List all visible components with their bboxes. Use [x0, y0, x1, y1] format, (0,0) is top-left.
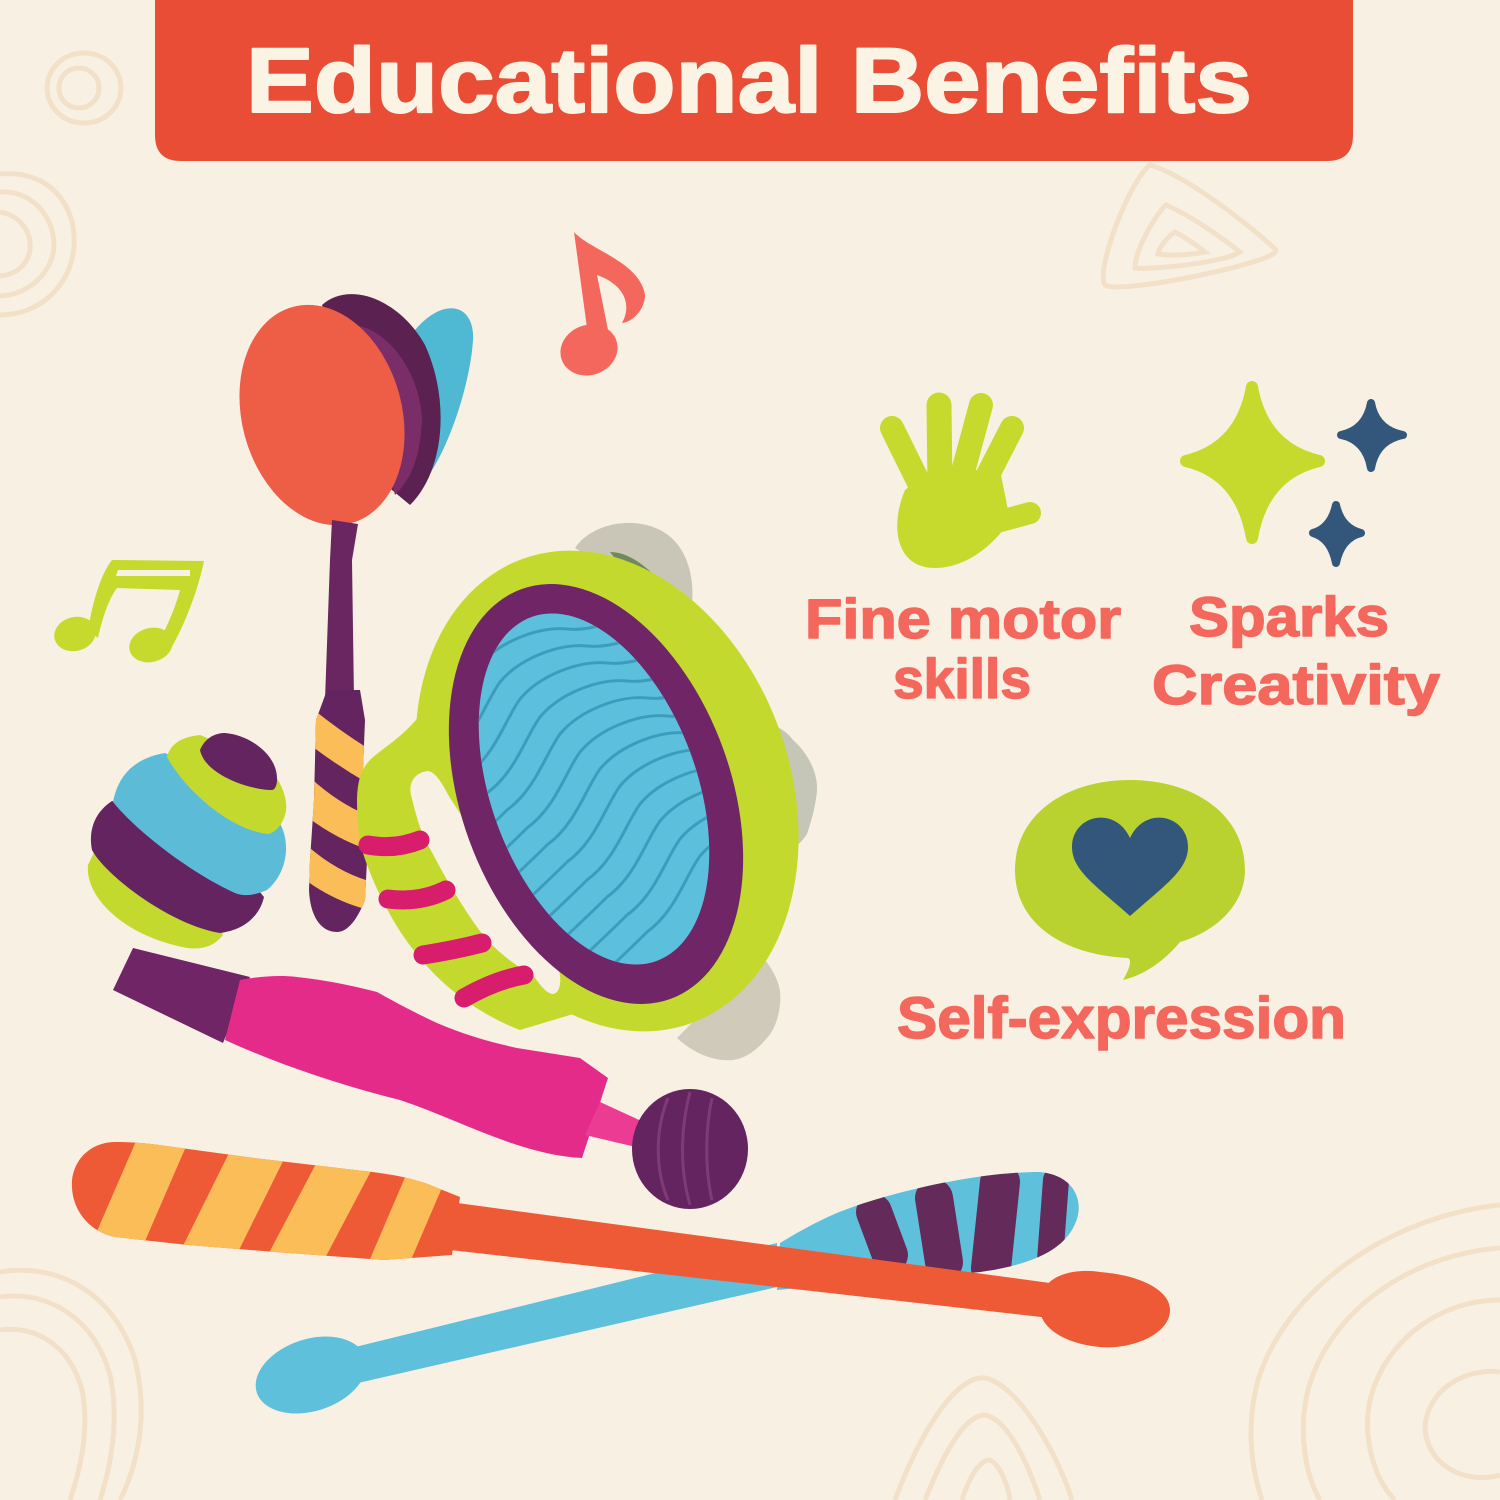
label: fine motor skills: Fine motor [805, 587, 1121, 650]
title: Educational Benefits [246, 30, 1252, 132]
toy: egg shaker [88, 733, 286, 948]
toy: pink kazoo [113, 948, 748, 1209]
toy: tambourine [357, 522, 817, 1060]
title banner [155, 0, 1353, 161]
icon: sparkles [1186, 387, 1403, 563]
icon: hand [892, 405, 1030, 568]
label: sparks creativity: Sparks [1189, 585, 1389, 648]
toy: castanet maraca [216, 286, 473, 932]
toy: blue drumstick [246, 1172, 1079, 1427]
label: self-expression: Self-expression [897, 986, 1346, 1051]
icon: speech bubble with heart [1015, 780, 1245, 980]
toy: orange drumstick [72, 1130, 1170, 1347]
icon: green music notes [50, 560, 204, 667]
label: fine motor skills: skills [893, 647, 1031, 710]
label: sparks creativity: Creativity [1152, 653, 1440, 716]
icon: red music note [553, 232, 645, 383]
